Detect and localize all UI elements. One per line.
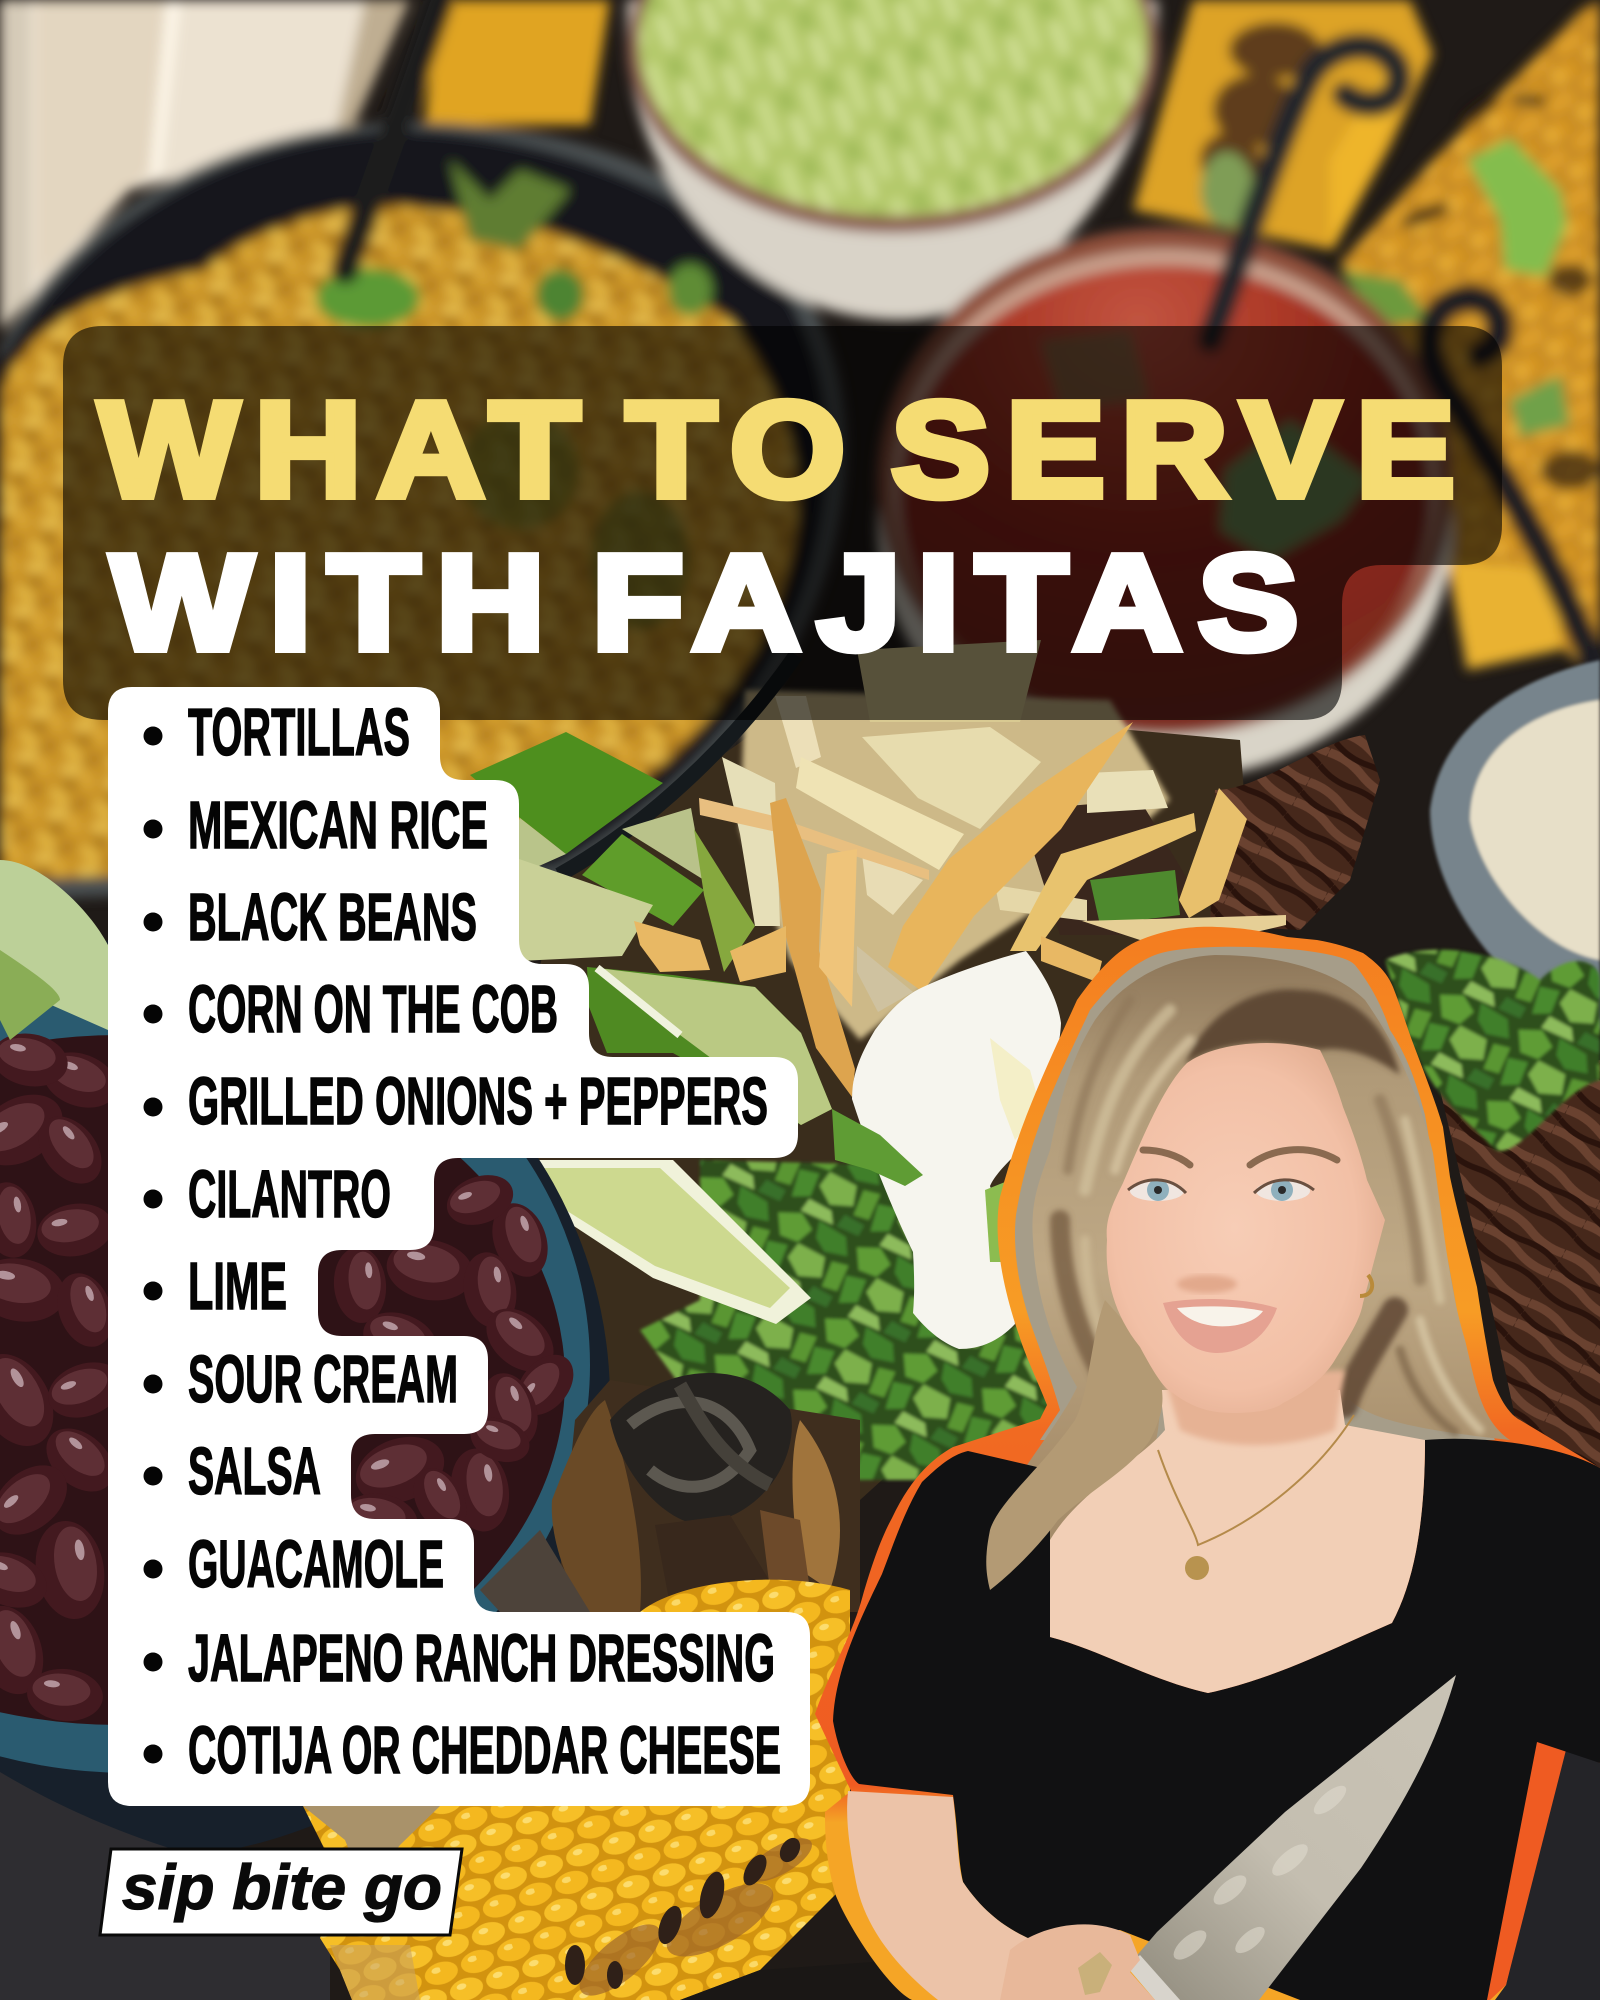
arm — [847, 1791, 1030, 2000]
lime: pale slice — [519, 859, 653, 961]
lettuce — [0, 860, 108, 1040]
lime wedge, centre — [587, 967, 832, 1125]
necklace — [1158, 1415, 1354, 1580]
gold ring — [1078, 1952, 1112, 1995]
spoon handle in rice bowl — [345, 0, 440, 270]
steak on the right — [1440, 1060, 1600, 1470]
salsa bowl — [877, 228, 1453, 780]
list items: BLACK BEANS — [188, 880, 477, 955]
steak strips near dressing — [1210, 735, 1380, 930]
neck and chest — [1050, 1390, 1425, 1693]
list background — [108, 687, 810, 1806]
black top — [833, 1439, 1600, 2000]
title line 1: WHAT TO SERVE — [99, 374, 1471, 525]
lime: pale flesh — [622, 808, 704, 880]
list items: TORTILLAS — [188, 695, 410, 770]
list items: JALAPENO RANCH DRESSING — [188, 1621, 775, 1696]
beans cluster left — [0, 1028, 130, 1724]
spoon in salsa — [1210, 46, 1399, 340]
earring — [1360, 1275, 1372, 1296]
cilantro under sour cream — [640, 1160, 1060, 1480]
black bowl of rice — [0, 122, 846, 900]
grilled corn on the cob — [303, 1580, 850, 2000]
list items: CORN ON THE COB — [188, 972, 558, 1047]
lime: wedge in bowl — [582, 834, 704, 926]
tortillas — [0, 0, 410, 330]
nose shadow — [1177, 1275, 1237, 1293]
list panel — [108, 687, 810, 1806]
steak strips behind cheese — [1020, 800, 1200, 935]
board base under toppings — [500, 700, 1260, 1500]
smile — [1163, 1299, 1277, 1353]
sour cream dollop — [852, 951, 1061, 1349]
logo: sip bite go: sip bite go — [122, 1853, 442, 1923]
lime wedge, large — [513, 1160, 811, 1324]
list items: GRILLED ONIONS + PEPPERS — [188, 1064, 768, 1139]
limes — [470, 655, 796, 972]
portrait cut-out — [815, 927, 1600, 2000]
hand — [1000, 1924, 1155, 2000]
pale cheese bed — [740, 690, 1170, 1040]
grilled onions and peppers — [552, 1373, 860, 1612]
cream dressing bowl — [1430, 660, 1600, 1030]
list bullets — [144, 726, 162, 1764]
cilantro on the right — [1385, 950, 1600, 1151]
marble bottom right — [1490, 1750, 1600, 2000]
black bean bowl — [0, 940, 610, 1860]
orange strip on the right — [1470, 1735, 1566, 2000]
list items: SOUR CREAM — [188, 1342, 458, 1417]
beige backing — [1015, 947, 1495, 1440]
beans cluster right — [331, 1166, 585, 1552]
dark board strip under corn — [680, 1960, 900, 2000]
list items: MEXICAN RICE — [188, 788, 488, 863]
bowl rim arc — [559, 655, 796, 875]
list items — [188, 695, 781, 1788]
orange outline — [815, 927, 1600, 2000]
guacamole bowl — [627, 0, 1159, 320]
list items: COTIJA OR CHEDDAR CHEESE — [188, 1713, 781, 1788]
title line 2: WITH FAJITAS — [111, 527, 1315, 678]
list items: CILANTRO — [188, 1157, 391, 1232]
hair lock over shoulder — [986, 1300, 1162, 1590]
list items: LIME — [188, 1249, 287, 1324]
lime: green wedge — [694, 829, 755, 972]
bottom left marble — [0, 1772, 330, 2000]
title — [99, 374, 1471, 678]
green sprigs behind cheese — [1090, 870, 1180, 925]
top corn cob — [425, 0, 610, 125]
wooden board — [480, 1530, 590, 1612]
top of photo: tortillas, bowls, corn (soft focus) — [0, 0, 1600, 900]
hair — [986, 955, 1510, 1590]
corn cob right — [1133, 0, 1600, 680]
hair strands and dark roots — [1005, 989, 1480, 1560]
lime: dark rind — [470, 732, 663, 854]
neck shadow — [1165, 1370, 1345, 1445]
face — [1107, 1043, 1385, 1413]
title panel — [63, 326, 1502, 720]
list items: GUACAMOLE — [188, 1527, 444, 1602]
spoon on the right — [1430, 298, 1600, 680]
shredded cheese — [634, 640, 1286, 1097]
lime: cut face — [505, 818, 566, 870]
list items: SALSA — [188, 1434, 321, 1509]
eyes and brows — [1128, 1150, 1337, 1201]
knife — [1127, 1675, 1456, 2000]
leaf garnish — [832, 1109, 923, 1186]
